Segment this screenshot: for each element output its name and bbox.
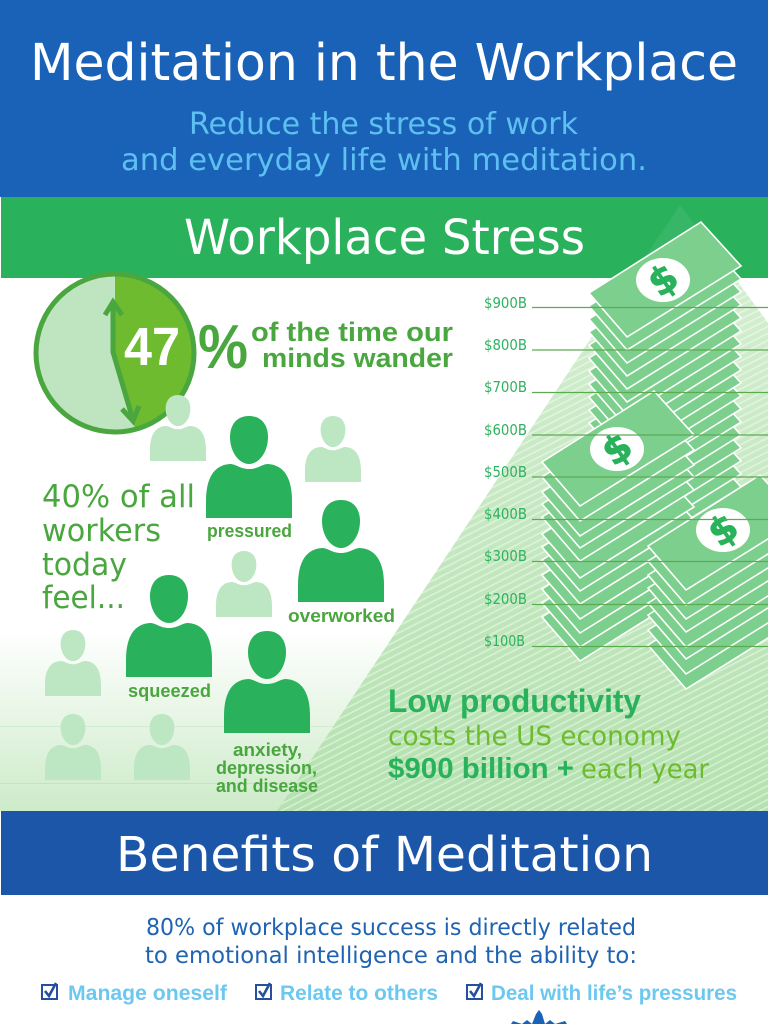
- text: emotional intelligence: to emotional intelligence and the ability to:: [145, 943, 637, 969]
- money stack: front: [648, 475, 768, 689]
- icon: dollar coin on middle stack: $: [594, 423, 640, 475]
- 47 number: 47: [124, 317, 180, 377]
- icon: lotus burst: [511, 1010, 567, 1024]
- person: overworked: overworked: [288, 606, 395, 626]
- person: anxiety, depression, disease: anxiety,: [233, 740, 302, 760]
- arrow: clock hands: [105, 302, 139, 421]
- chart scale: dollar levels: [484, 294, 768, 650]
- chart scale: dollar levels: $300B: [484, 547, 527, 565]
- money stack: back: [589, 222, 741, 571]
- text: 40 percent of workers: today: [42, 547, 127, 583]
- person: anxiety, depression, disease: and disease: [216, 776, 318, 796]
- callout: low productivity cost: each year: [581, 754, 710, 785]
- callout: low productivity cost: $900 billion +: [388, 753, 574, 785]
- icon: dollar coin on back stack: $: [640, 254, 686, 306]
- text: 40 percent of workers: [42, 479, 195, 616]
- text: time minds wander: [251, 317, 453, 373]
- chart scale: dollar levels: $900B: [484, 294, 527, 312]
- chart scale: dollar levels: $800B: [484, 336, 527, 354]
- section banner: benefits of meditation: [1, 811, 768, 895]
- pie clock: 47 percent: [36, 274, 194, 432]
- text: 40 percent of workers: 40% of all: [42, 479, 195, 515]
- person: overworked: [288, 500, 395, 626]
- person: squeezed: [126, 575, 212, 701]
- text: 40 percent of workers: feel...: [42, 580, 125, 616]
- people: light figures: [45, 395, 361, 780]
- chart scale: dollar levels: $700B: [484, 378, 527, 396]
- person: pressured: pressured: [207, 521, 292, 541]
- chart scale: dollar levels: $100B: [484, 632, 525, 650]
- text: time minds wander: of the time our: [251, 317, 453, 347]
- text: emotional intelligence: [145, 915, 637, 969]
- callout: low productivity cost: Low productivity: [388, 683, 641, 719]
- subtitle: and everyday life with meditation.: [121, 143, 647, 178]
- money stack: middle: [542, 391, 694, 661]
- checklist item: manage oneself: Manage oneself: [68, 981, 228, 1005]
- section banner: workplace stress: [1, 197, 768, 278]
- text: emotional intelligence: 80% of workplace success is directly related: [146, 915, 636, 941]
- checklist item: deal with pressures: Deal with life’s pressures: [491, 981, 737, 1005]
- person: anxiety, depression, disease: [216, 631, 318, 796]
- chart scale: dollar levels: $400B: [484, 505, 527, 523]
- text: time minds wander: minds wander: [262, 343, 453, 373]
- hatched pyramid behind money: [277, 205, 768, 811]
- subtitle: Reduce the stress of work: [189, 107, 579, 142]
- callout: low productivity cost: costs the US economy: [388, 721, 681, 752]
- header panel: [0, 0, 768, 197]
- chart scale: dollar levels: $200B: [484, 590, 527, 608]
- percent sign: %: [198, 313, 248, 382]
- icon: dollar coin on front stack: $: [700, 504, 746, 556]
- person: pressured: [206, 416, 292, 541]
- title: Meditation in the Workplace: [30, 34, 738, 93]
- section banner: workplace stress: Workplace Stress: [184, 210, 585, 266]
- section banner: benefits of meditation: Benefits of Meditation: [116, 827, 653, 883]
- person: anxiety, depression, disease: depression,: [216, 758, 317, 778]
- callout: low productivity cost: [388, 683, 710, 785]
- subtitle: [121, 107, 647, 178]
- chart scale: dollar levels: $600B: [484, 421, 527, 439]
- chart scale: dollar levels: $500B: [484, 463, 527, 481]
- person: squeezed: squeezed: [128, 681, 211, 701]
- checklist item: relate to others: Relate to others: [280, 981, 438, 1005]
- background fade: lower workplace stress panel: [0, 630, 768, 811]
- text: 40 percent of workers: workers: [42, 513, 161, 549]
